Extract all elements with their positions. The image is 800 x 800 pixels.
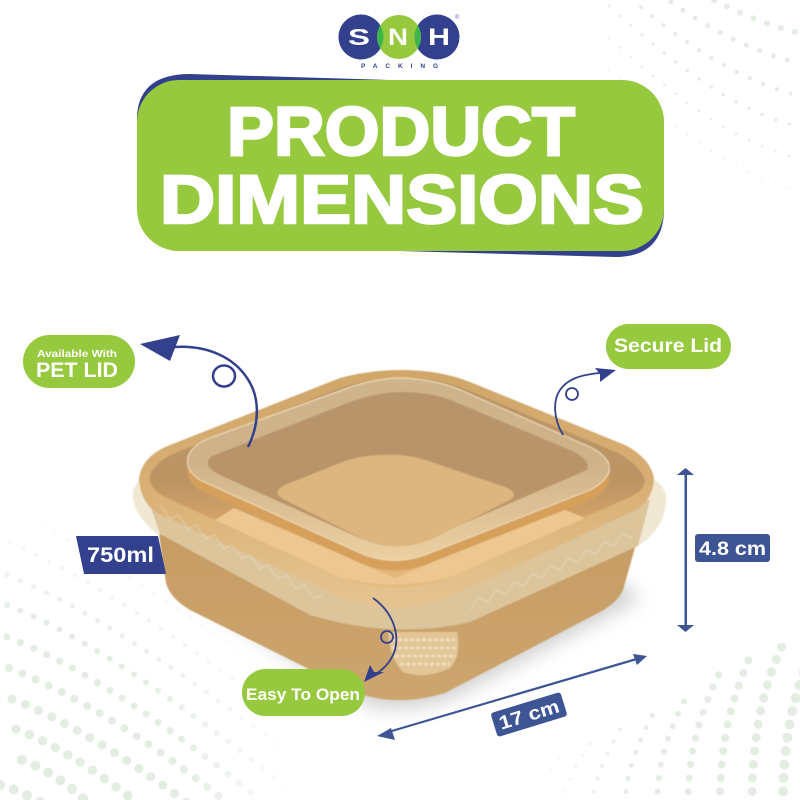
logo: ® <box>455 14 460 21</box>
flange ears <box>133 478 200 540</box>
label: capacity: 750ml <box>87 544 154 567</box>
callout: secure lid <box>606 324 731 369</box>
logo: N <box>388 24 408 51</box>
callout: PET lid: PET LID <box>36 359 118 382</box>
navy swoosh behind banner <box>137 74 664 257</box>
label: height: 4.8 cm <box>699 539 766 560</box>
ridges <box>160 505 322 599</box>
logo: PACKING <box>361 63 438 70</box>
shadow <box>175 570 640 709</box>
lid plateau <box>208 392 588 545</box>
callout: easy to open <box>242 669 365 716</box>
logo <box>338 14 460 70</box>
flange <box>150 500 650 630</box>
callout: secure lid: Secure Lid <box>614 336 722 357</box>
arrow: secure lid <box>555 368 616 435</box>
label: width: 17 cm <box>497 696 562 735</box>
inner strips <box>215 508 585 584</box>
interior <box>150 378 645 588</box>
lid <box>188 378 609 560</box>
pull tab <box>388 632 458 675</box>
callout: PET lid <box>23 335 135 388</box>
label: width <box>490 692 568 737</box>
width arrow <box>377 654 647 740</box>
rim <box>139 370 654 608</box>
title banner: PRODUCT <box>227 93 575 170</box>
callout: easy to open: Easy To Open <box>246 685 360 704</box>
height arrow <box>677 468 694 632</box>
callout: PET lid: Available With <box>37 348 117 360</box>
logo: S <box>348 24 370 50</box>
floor <box>278 455 514 546</box>
lid shadow <box>188 460 609 570</box>
logo: H <box>428 24 450 51</box>
walls <box>157 500 640 700</box>
kraft container with lid <box>133 370 666 709</box>
label: height <box>695 534 770 562</box>
arrow: PET lid <box>140 335 257 447</box>
title banner: DIMENSIONS <box>160 161 644 238</box>
label: capacity <box>76 536 166 574</box>
title banner <box>137 74 664 257</box>
arrow: easy to open <box>364 598 396 682</box>
